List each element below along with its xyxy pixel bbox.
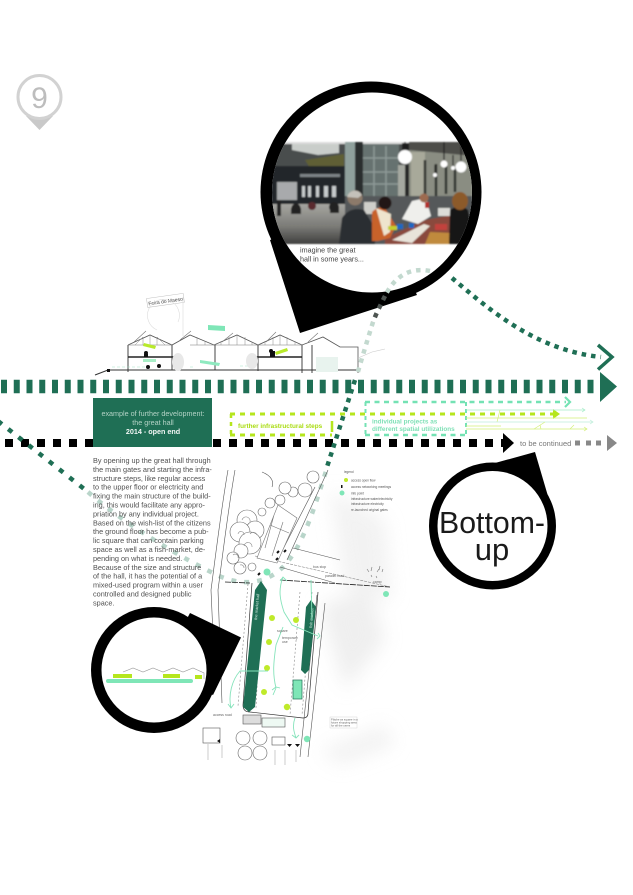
mint access points (264, 568, 389, 742)
individual projects: mint dashed frame: individual projects as (372, 418, 438, 426)
body text block: pending on what is needed. (93, 554, 182, 563)
legend: infrastructure electricity (351, 502, 384, 506)
body text block: structure steps, like regular access (93, 474, 206, 483)
parking and temporary labels: use (282, 640, 288, 644)
further infrastructural steps: lime dashed frame: further infrastructural steps (238, 423, 323, 430)
existing building (257, 505, 297, 563)
body text block: of the hall, it has the potential of a (93, 572, 203, 581)
plaza outline (243, 583, 318, 718)
mint square (293, 680, 302, 699)
body text block: Based on the wish-list of the citizens (93, 518, 211, 527)
caption: imagine the great hall (300, 246, 364, 264)
annotation box: future shopping area (331, 720, 357, 724)
title box: example of further development: 2014 - open end (126, 427, 180, 436)
lower trees and buildings (236, 731, 267, 760)
main timeline: thick green dashed arrow (1, 372, 617, 402)
legend: infrastructure water/electricity (351, 497, 393, 501)
body text block: the ground floor has become a pub- (93, 527, 209, 536)
body text block: space. (93, 598, 114, 607)
parking and temporary labels: square (277, 629, 288, 633)
body text block: priation by any individual project. (93, 509, 199, 518)
section drawing of the great hall (95, 293, 385, 375)
site plan map (203, 470, 395, 765)
parking and temporary labels: camp (373, 580, 382, 584)
body text block: to the upper floor or electricity and (93, 483, 203, 492)
parking and temporary labels: bus stop (313, 565, 326, 569)
chevron arrow head of dotted route (598, 345, 612, 370)
trees upper group (227, 471, 319, 574)
market stall (385, 215, 452, 244)
legend: info point (351, 492, 364, 496)
dotted route crossing the large pin (326, 270, 601, 470)
annotation box: Fläche as square in a (331, 718, 358, 722)
further infrastructural steps: lime dashed frame (230, 409, 560, 435)
body text block: the main gates and starting the infra- (93, 465, 212, 474)
title box: example of further development: example of further development: (101, 409, 205, 418)
mint flow arrows (228, 577, 320, 738)
woman in orange (372, 208, 396, 241)
body text block: ing, this would facilitate any appro- (93, 500, 206, 510)
legend: legend (344, 470, 354, 474)
body text block: By opening up the great hall through (93, 456, 211, 465)
individual projects: mint dashed frame (365, 397, 570, 435)
to be continued grey arrow (520, 435, 617, 451)
lime activity blobs (261, 615, 299, 710)
body text block: fixing the main structure of the build- (93, 492, 211, 501)
bottom-up pin: up (475, 532, 509, 567)
large pin with market photo (260, 82, 482, 333)
grey-haired man (339, 209, 375, 244)
annotation box (330, 717, 358, 728)
legend: re-launched original gates (351, 508, 388, 512)
mini section with programme bars (106, 668, 204, 683)
man in white (402, 198, 431, 224)
hanging lamps (405, 142, 461, 173)
parking and temporary labels: access road (213, 713, 232, 717)
to be continued grey arrow: to be continued (520, 439, 571, 448)
photo: market inside the hall (270, 142, 474, 244)
title box: example of further development (93, 398, 212, 447)
roads (211, 470, 235, 703)
site plan map: the market hall (253, 593, 260, 620)
market stall pills (243, 581, 316, 712)
caption: imagine the great hall: hall in some years... (300, 254, 364, 264)
body text block: space as well as a fish-market, de- (93, 545, 206, 554)
parking and temporary labels: temporary (282, 636, 298, 640)
people silhouettes (107, 349, 275, 372)
legend (340, 470, 393, 512)
lime and mint programme tags (143, 325, 288, 366)
icon: page number pin 9: 9 (31, 82, 48, 115)
individual projects: mint dashed frame: different spatial utilizations (372, 426, 455, 433)
bottom-up pin: Bottom- (439, 505, 545, 540)
body text block: controlled and designed public (93, 590, 192, 598)
site plan map: fish market (308, 607, 315, 628)
parking and temporary labels: parallel road (325, 574, 344, 578)
infrastructure timeline: black dashed arrow (5, 433, 514, 453)
body text block: lic square that can contain parking (93, 536, 204, 545)
legend: access open flow (351, 478, 376, 482)
trees in camp area (367, 566, 383, 578)
thumbnail pin with section diagram (91, 607, 241, 733)
body text block: Because of the size and structure (93, 563, 201, 572)
light dotted route through the map (88, 465, 328, 582)
icon: page number pin 9 (18, 76, 61, 130)
label: Feira do Maeso: Feira do Maeso (148, 297, 183, 307)
body text block (93, 456, 212, 607)
watercolor terrain wash (320, 490, 395, 765)
annotation box: for all the users (331, 724, 351, 728)
thin future project arrows (466, 408, 593, 431)
woman at right (448, 207, 470, 245)
body text block: mixed-used program within a user (93, 581, 203, 590)
bottom-up pin (429, 452, 556, 590)
dotted dark green line left (0, 421, 88, 492)
parking and temporary labels (213, 565, 382, 717)
title box: example of further development: the great hall (132, 418, 174, 427)
legend: access networking meetings (351, 485, 391, 489)
caption: imagine the great hall: imagine the great (300, 246, 356, 254)
